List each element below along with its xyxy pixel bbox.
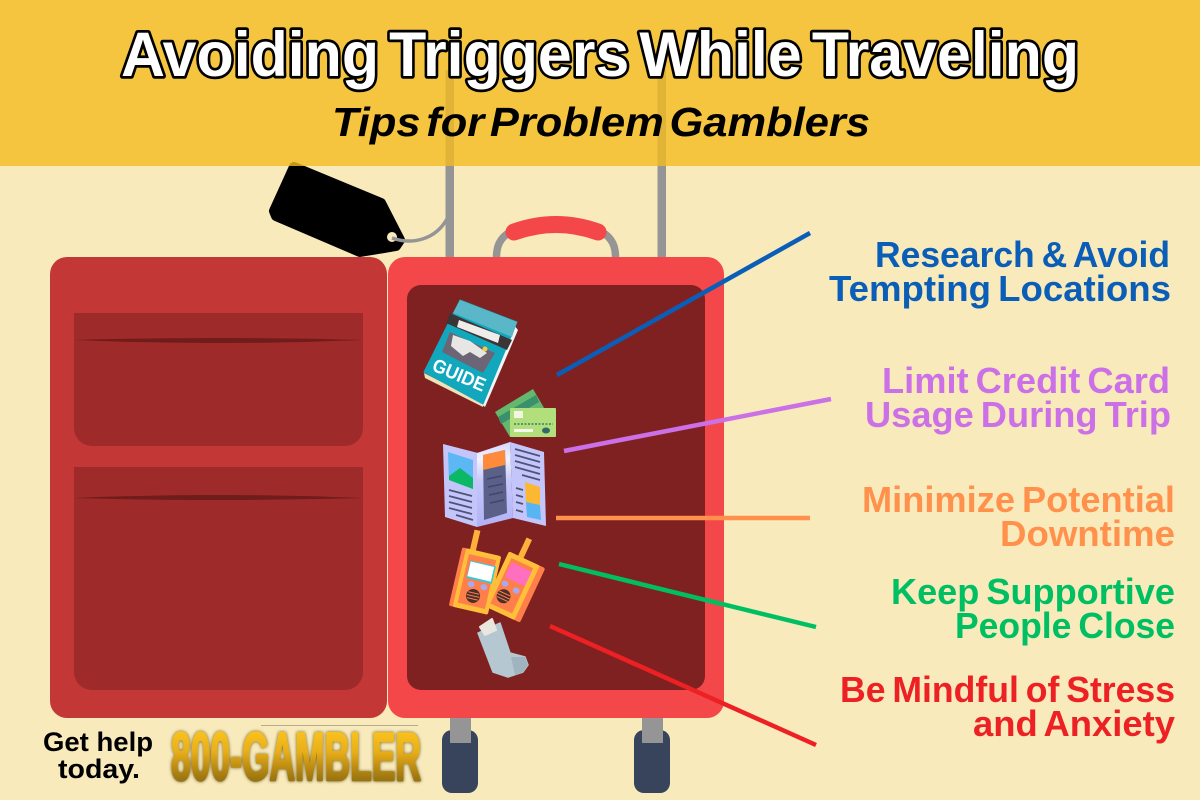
left radio [449, 528, 506, 615]
tip: downtime: Minimize Potential [862, 479, 1175, 520]
connector lines [550, 233, 831, 745]
luggage tag [274, 167, 447, 252]
line: credit card [564, 399, 831, 451]
suitcase wheels [442, 716, 670, 793]
tip: credit card [865, 360, 1171, 435]
tip: downtime: Downtime [1000, 513, 1175, 554]
line: downtime [556, 516, 810, 520]
suitcase carry handle [496, 224, 616, 260]
icon: guide book [424, 300, 518, 407]
tip: supportive people [891, 571, 1175, 646]
tip: downtime [862, 479, 1175, 554]
header banner [0, 0, 1200, 166]
icon: credit cards [495, 389, 556, 437]
tip: credit card: Usage During Trip [865, 394, 1171, 435]
suitcase left lid with pockets [50, 257, 387, 718]
line: supportive people [559, 564, 816, 627]
icon: guide book: GUIDE [429, 355, 489, 396]
tip: research: Tempting Locations [829, 268, 1171, 309]
upper pocket [74, 313, 363, 446]
suitcase open right side [388, 257, 724, 718]
line: research [557, 233, 810, 375]
tip: stress: Be Mindful of Stress [840, 669, 1175, 710]
tip: supportive people: Keep Supportive [891, 571, 1175, 612]
lower pocket [74, 467, 363, 690]
tip: research [829, 234, 1171, 309]
tip: credit card: Limit Credit Card [882, 360, 1170, 401]
icon: walkie talkies [449, 528, 554, 623]
800-GAMBLER logo: 800-GAMBLER [171, 719, 421, 795]
tip: research: Research & Avoid [875, 234, 1170, 275]
help call to action: Get help [43, 727, 153, 757]
icon: folded map [443, 442, 546, 527]
right radio [484, 533, 554, 623]
suitcase telescopic handle [446, 70, 666, 260]
line: stress [550, 626, 816, 745]
tip: stress [840, 669, 1175, 744]
tip: supportive people: People Close [955, 605, 1175, 646]
icon: inhaler [478, 619, 528, 677]
tip: stress: and Anxiety [973, 703, 1175, 744]
subtitle: Tips for Problem Gamblers [332, 99, 870, 145]
help call to action [43, 727, 153, 784]
title: Avoiding Triggers While Traveling [121, 20, 1079, 90]
help call to action: today. [58, 754, 140, 784]
